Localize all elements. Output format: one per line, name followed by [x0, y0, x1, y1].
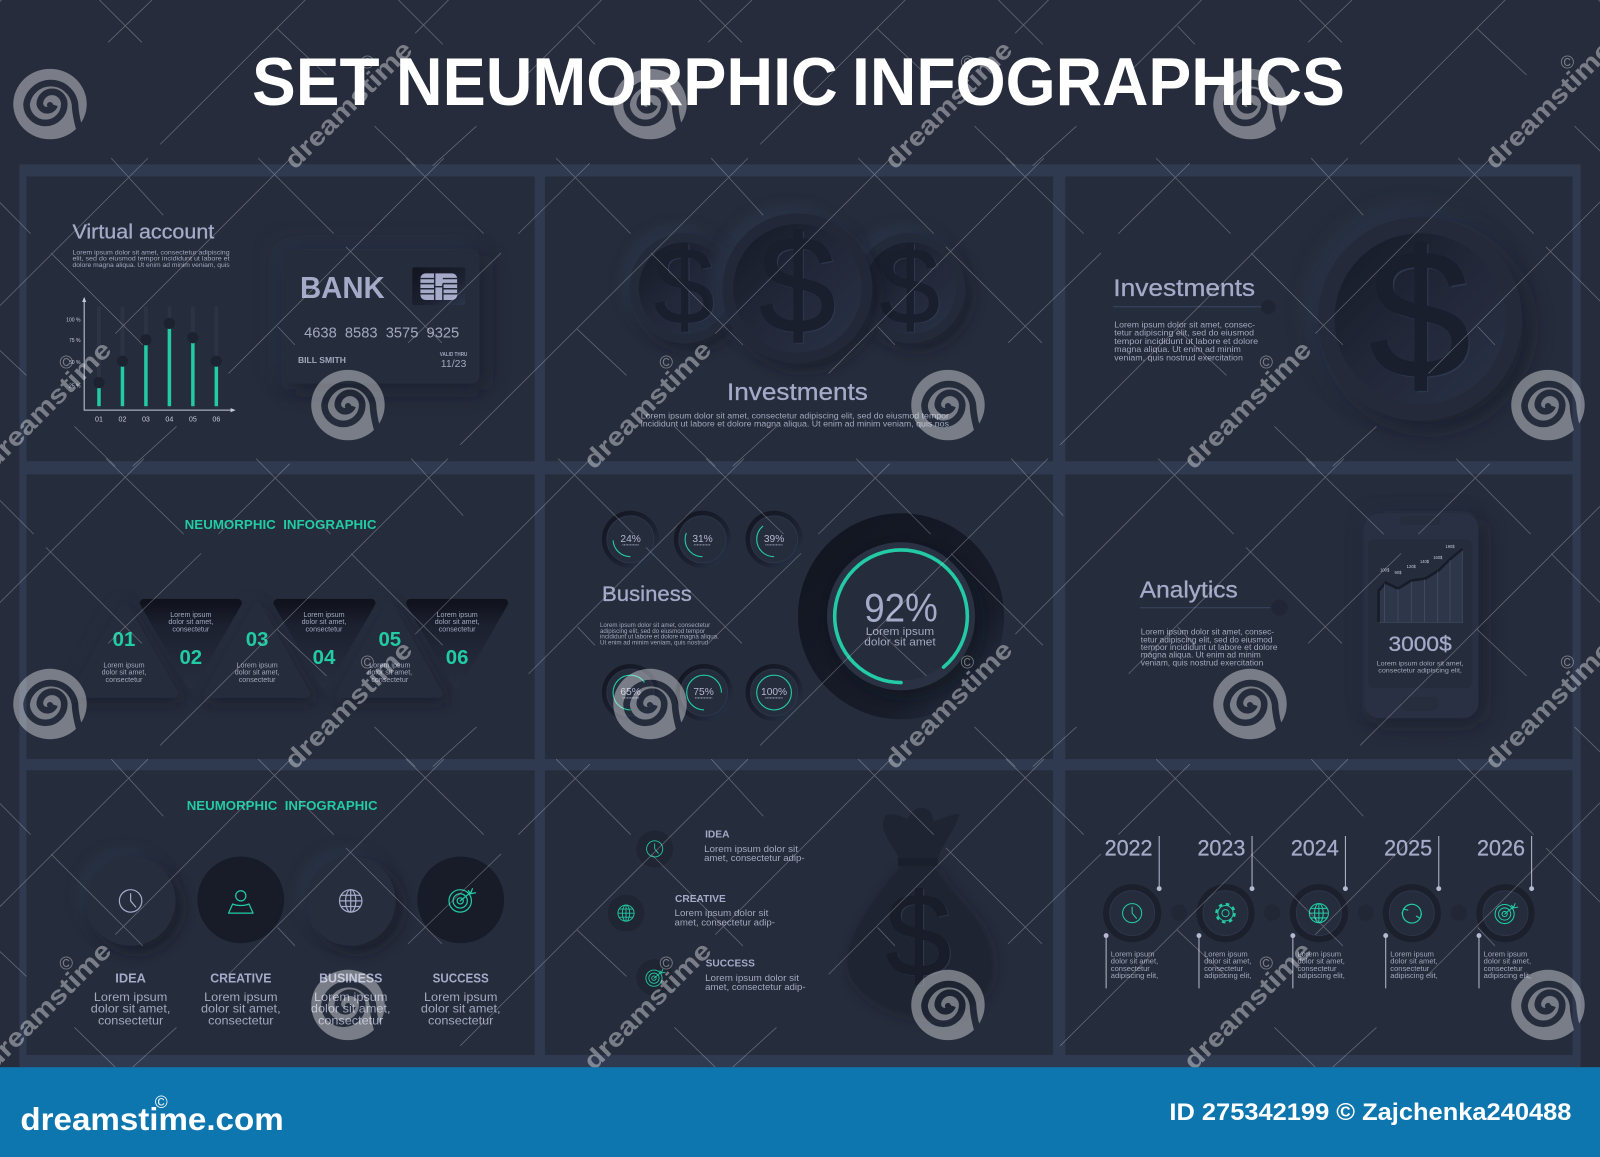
panel: investments coins	[545, 177, 1053, 461]
captions	[91, 990, 501, 1027]
step numbers: 03	[246, 629, 268, 651]
item: success: Lorem ipsum dolor sit	[705, 973, 799, 983]
step captions	[102, 611, 480, 684]
grid frame	[19, 164, 1581, 1068]
labels: SUCCESS	[433, 971, 489, 986]
step captions: consectetur	[239, 676, 276, 684]
text block: Lorem ipsum dolor sit amet, consectetur	[600, 622, 711, 629]
icon: money bag	[848, 808, 993, 1018]
years: 2024	[1291, 836, 1339, 861]
timeline captions: dolor sit amet,	[1297, 957, 1345, 966]
icon: right coin: $	[879, 226, 940, 348]
area line chart: 120$	[1407, 564, 1416, 569]
text block: veniam, quis nostrud exercitation	[1141, 659, 1263, 668]
captions: Lorem ipsum	[314, 990, 387, 1004]
area line chart: 100$	[1380, 567, 1390, 572]
watermark overlay: ©	[361, 651, 375, 672]
icon: big coin: $	[1371, 215, 1473, 419]
captions: dolor sit amet,	[311, 1002, 391, 1016]
panel: analytics	[1065, 474, 1572, 759]
labels: CREATIVE	[210, 971, 271, 986]
small gauges	[602, 511, 803, 721]
timeline captions: consectetur	[1484, 964, 1523, 973]
icon: left coin: $	[655, 227, 716, 349]
bank card: BILL SMITH	[298, 356, 346, 365]
heading: virtual account: Virtual account	[72, 222, 215, 244]
years: 2025	[1384, 836, 1432, 861]
item: creative	[608, 894, 775, 932]
timeline captions: adipiscing elit,	[1484, 971, 1531, 980]
labels: IDEA	[115, 971, 146, 986]
circle: success	[417, 857, 504, 943]
timeline connector lines	[1104, 836, 1534, 988]
captions: Lorem ipsum	[424, 990, 497, 1004]
watermark overlay: ©	[961, 651, 975, 672]
timeline captions: Lorem ipsum	[1390, 950, 1434, 959]
item: idea: IDEA	[705, 830, 730, 841]
title: INFOGRAPHICS	[852, 45, 1345, 120]
step numbers: 06	[446, 647, 468, 669]
icon: centre coin: $	[759, 208, 836, 363]
step captions: dolor sit amet,	[367, 668, 412, 676]
circle: creative	[197, 857, 284, 943]
timeline captions: consectetur	[1111, 964, 1150, 973]
inset triangles 02 04 06	[144, 603, 504, 685]
step captions: dolor sit amet,	[168, 618, 213, 626]
icon: big coin: $	[1369, 213, 1471, 417]
watermark overlay: ©	[1561, 651, 1575, 672]
panel: four circles	[27, 770, 535, 1055]
timeline captions: adipiscing elit,	[1111, 971, 1158, 980]
bar chart with sliders: 03	[142, 415, 150, 423]
step captions: dolor sit amet,	[102, 668, 146, 676]
icon: money bag: $	[887, 871, 953, 1003]
chart: 92 percent gauge	[798, 513, 1004, 719]
step captions: consectetur	[106, 676, 143, 684]
icon: big coin	[1309, 208, 1531, 430]
watermark overlay: dreamstime	[1479, 36, 1600, 175]
chart: 92 percent gauge: dolor sit amet	[864, 636, 936, 648]
panel: investments big coin	[1065, 177, 1572, 461]
bank card: BANK	[300, 271, 385, 305]
watermark overlay: ©	[961, 51, 975, 72]
watermark overlay: dreamstime	[578, 937, 717, 1076]
step captions: Lorem ipsum	[170, 611, 211, 619]
area line chart: 190$	[1445, 544, 1455, 549]
footer logo mark: ©	[155, 1092, 168, 1112]
title: SET	[252, 45, 380, 120]
phone with chart: consectetur adipiscing elit,	[1378, 667, 1462, 674]
text block: dolore magna aliqua. Ut enim ad minim veniam, quis	[72, 262, 230, 269]
panel: timeline	[1065, 770, 1572, 1055]
bar chart with sliders: 100 %	[66, 317, 81, 323]
captions: dolor sit amet,	[91, 1002, 170, 1016]
heading: business: Business	[602, 582, 692, 606]
circle: business	[300, 850, 402, 952]
text block	[641, 411, 949, 428]
labels	[115, 971, 489, 986]
icon: right coin	[849, 226, 971, 350]
captions: dolor sit amet,	[201, 1002, 281, 1016]
timeline captions: dolor sit amet,	[1484, 957, 1531, 966]
step captions: dolor sit amet,	[235, 668, 280, 676]
text block	[72, 250, 230, 269]
step captions: consectetur	[306, 626, 343, 634]
bar chart with sliders: 04	[165, 415, 173, 423]
watermark overlay: dreamstime	[879, 36, 1018, 175]
captions: consectetur	[318, 1013, 383, 1027]
step captions: consectetur	[371, 676, 409, 684]
text block: Lorem ipsum dolor sit amet, consec-	[1114, 321, 1255, 330]
step captions: Lorem ipsum	[103, 661, 145, 669]
text block: tetur adipiscing elit, sed do eiusmod	[1141, 635, 1272, 644]
bar chart with sliders: 75 %	[69, 338, 81, 344]
text block	[1141, 628, 1278, 668]
timeline captions: Lorem ipsum	[1297, 950, 1341, 959]
heading: investments: Investments	[727, 379, 868, 406]
chart: 92 percent gauge: 92%	[864, 586, 938, 630]
item: creative: amet, consectetur adip-	[674, 917, 775, 927]
chart: 92 percent gauge: Lorem ipsum	[866, 626, 934, 638]
text block: Lorem ipsum dolor sit amet, consectetur adipiscing	[72, 250, 230, 257]
icon: card chip	[412, 267, 465, 305]
text block: Lorem ipsum dolor sit amet, consec-	[1141, 628, 1274, 637]
timeline captions	[1111, 950, 1531, 980]
item: idea: amet, consectetur adip-	[704, 853, 805, 863]
panel: triangle steps	[27, 474, 535, 759]
divider with knob	[1113, 300, 1276, 314]
watermark overlay: ©	[660, 952, 674, 973]
icon: right coin: $	[881, 227, 942, 349]
bar chart with sliders: 06	[212, 415, 220, 423]
bank card: 4638 8583 3575 9325	[304, 326, 459, 342]
divider with knob	[1140, 599, 1288, 616]
timeline captions: consectetur	[1204, 964, 1244, 973]
captions: Lorem ipsum	[94, 990, 167, 1004]
bar chart with sliders: 02	[118, 415, 126, 423]
step captions: consectetur	[172, 626, 210, 634]
text block: incididunt ut labore et dolore magna aliqua. Ut enim ad minim veniam, quis nos	[641, 419, 949, 428]
timeline captions: adipiscing elit,	[1297, 971, 1345, 980]
watermark overlay: dreamstime	[1178, 336, 1317, 475]
step numbers: 04	[313, 647, 336, 669]
bank card: VALID THRU	[440, 352, 468, 358]
heading: analytics: Analytics	[1140, 576, 1238, 602]
years: 2022	[1105, 836, 1153, 861]
heading: neumorphic infographic: NEUMORPHIC INFOGRAPHIC	[187, 798, 378, 813]
text block: incididunt ut labore et dolore magna aliqua.	[600, 634, 719, 641]
text block: magna aliqua. Ut enim ad minim	[1114, 345, 1241, 354]
small gauges: 65%	[620, 687, 641, 698]
small gauges: 24%	[620, 534, 641, 545]
timeline captions: consectetur	[1390, 964, 1430, 973]
years: 2023	[1197, 836, 1245, 861]
footer logo: dreamstime.com	[20, 1101, 284, 1137]
watermark overlay: dreamstime	[879, 636, 1018, 775]
watermark overlay: dreamstime	[1178, 937, 1317, 1076]
text block: elit, sed do eiusmod tempor incididunt ut labore et	[72, 256, 230, 263]
item: idea	[636, 830, 805, 867]
icon: centre coin: $	[760, 209, 838, 364]
icon: left coin: $	[654, 226, 715, 348]
circle: idea	[80, 850, 182, 952]
years	[1105, 836, 1525, 861]
item: creative: CREATIVE	[675, 894, 726, 905]
captions: consectetur	[98, 1013, 163, 1027]
bank card: 11/23	[441, 359, 467, 370]
icon: left coin	[623, 226, 746, 350]
small gauges: 75%	[693, 687, 714, 698]
panel: money bag	[545, 770, 1053, 1055]
icon: centre coin	[716, 207, 879, 370]
phone with chart: Lorem ipsum dolor sit amet,	[1377, 661, 1464, 668]
step numbers: 01	[113, 629, 135, 651]
step captions: consectetur	[439, 626, 476, 634]
labels: BUSINESS	[319, 971, 382, 986]
watermark overlay: ©	[660, 351, 674, 372]
years: 2026	[1477, 836, 1525, 861]
timeline captions: Lorem ipsum	[1111, 950, 1154, 959]
item: success	[636, 959, 806, 996]
text block	[1114, 321, 1259, 363]
area line chart: 160$	[1433, 555, 1443, 560]
text block: Lorem ipsum dolor sit amet, consectetur adipiscing elit, sed do eiusmod tempor	[641, 411, 949, 420]
step captions: Lorem ipsum	[437, 611, 478, 619]
step captions: dolor sit amet,	[435, 618, 480, 626]
watermark overlay: dreamstime	[279, 636, 418, 775]
timeline captions: consectetur	[1297, 964, 1337, 973]
footer credit: ID 275342199 © Zajchenka240488	[1169, 1099, 1571, 1126]
captions: consectetur	[428, 1013, 493, 1027]
captions: Lorem ipsum	[204, 990, 278, 1004]
timeline captions: adipiscing elit,	[1204, 971, 1251, 980]
item: success: amet, consectetur adip-	[705, 982, 806, 992]
step numbers	[113, 629, 468, 669]
text block: tempor incididunt ut labore et dolore	[1141, 643, 1278, 652]
step numbers: 02	[179, 647, 202, 669]
bar chart with sliders	[66, 297, 236, 423]
panel: business gauges	[545, 474, 1053, 759]
step captions: Lorem ipsum	[303, 611, 345, 619]
phone with chart	[1359, 508, 1484, 723]
bar chart with sliders: 25 %	[69, 384, 81, 390]
item: idea: Lorem ipsum dolor sit	[704, 844, 798, 854]
watermark overlay: ©	[1561, 51, 1575, 72]
bank card	[277, 244, 486, 390]
heading: investments: Investments	[1113, 275, 1255, 302]
icon: money bag: $	[885, 870, 951, 1002]
watermark overlay: dreamstime	[1479, 636, 1600, 775]
text block: veniam, quis nostrud exercitation	[1114, 354, 1243, 363]
heading: neumorphic infographic: NEUMORPHIC INFOGRAPHIC	[185, 517, 377, 532]
bar chart with sliders: 05	[189, 415, 197, 423]
area line chart: 90$	[1395, 570, 1402, 575]
step captions: Lorem ipsum	[369, 661, 410, 669]
text block: tempor incididunt ut labore et dolore	[1114, 337, 1259, 346]
item: creative: Lorem ipsum dolor sit	[674, 908, 769, 918]
panel: virtual account	[27, 177, 535, 461]
watermark overlay: ©	[1260, 952, 1274, 973]
step captions: dolor sit amet,	[302, 618, 346, 626]
item: success: SUCCESS	[706, 959, 755, 970]
timeline captions: Lorem ipsum	[1484, 950, 1527, 959]
text block: Ut enim ad minim veniam, quis nostrud	[600, 639, 709, 646]
timeline captions: Lorem ipsum	[1204, 950, 1248, 959]
small gauges: 100%	[761, 687, 787, 698]
captions: consectetur	[208, 1013, 273, 1027]
timeline circles	[1103, 884, 1535, 942]
watermark overlay: ©	[1260, 351, 1274, 372]
timeline captions: dolor sit amet,	[1204, 957, 1251, 966]
step captions: Lorem ipsum	[237, 661, 278, 669]
text block: adipiscing elit, sed do eiusmod tempor	[600, 628, 706, 635]
bar chart with sliders: 01	[95, 415, 103, 423]
watermark overlay: dreamstime	[578, 336, 717, 475]
text block	[600, 622, 719, 646]
phone with chart: 3000$	[1388, 633, 1452, 656]
watermark overlay: ©	[60, 351, 74, 372]
text block: tetur adipiscing elit, sed do eiusmod	[1114, 329, 1255, 338]
watermark overlay: ©	[60, 952, 74, 973]
title: NEUMORPHIC	[396, 45, 838, 120]
timeline captions: dolor sit amet,	[1390, 957, 1438, 966]
step numbers: 05	[378, 629, 401, 651]
area line chart: 140$	[1420, 559, 1430, 564]
small gauges: 39%	[764, 534, 784, 545]
watermark overlay: ©	[361, 51, 375, 72]
footer bar	[0, 1067, 1600, 1157]
raised triangles 01 03 05	[71, 603, 443, 699]
captions: dolor sit amet,	[421, 1002, 501, 1016]
connector knobs	[1171, 904, 1467, 921]
timeline captions: adipiscing elit,	[1390, 971, 1438, 980]
timeline captions: dolor sit amet,	[1111, 957, 1158, 966]
watermark overlay: dreamstime	[279, 36, 418, 175]
small gauges: 31%	[692, 534, 713, 545]
bar chart with sliders: 50 %	[69, 360, 81, 366]
area line chart	[1379, 544, 1463, 622]
text block: magna aliqua. Ut enim ad minim	[1141, 651, 1261, 660]
title	[252, 45, 1345, 120]
